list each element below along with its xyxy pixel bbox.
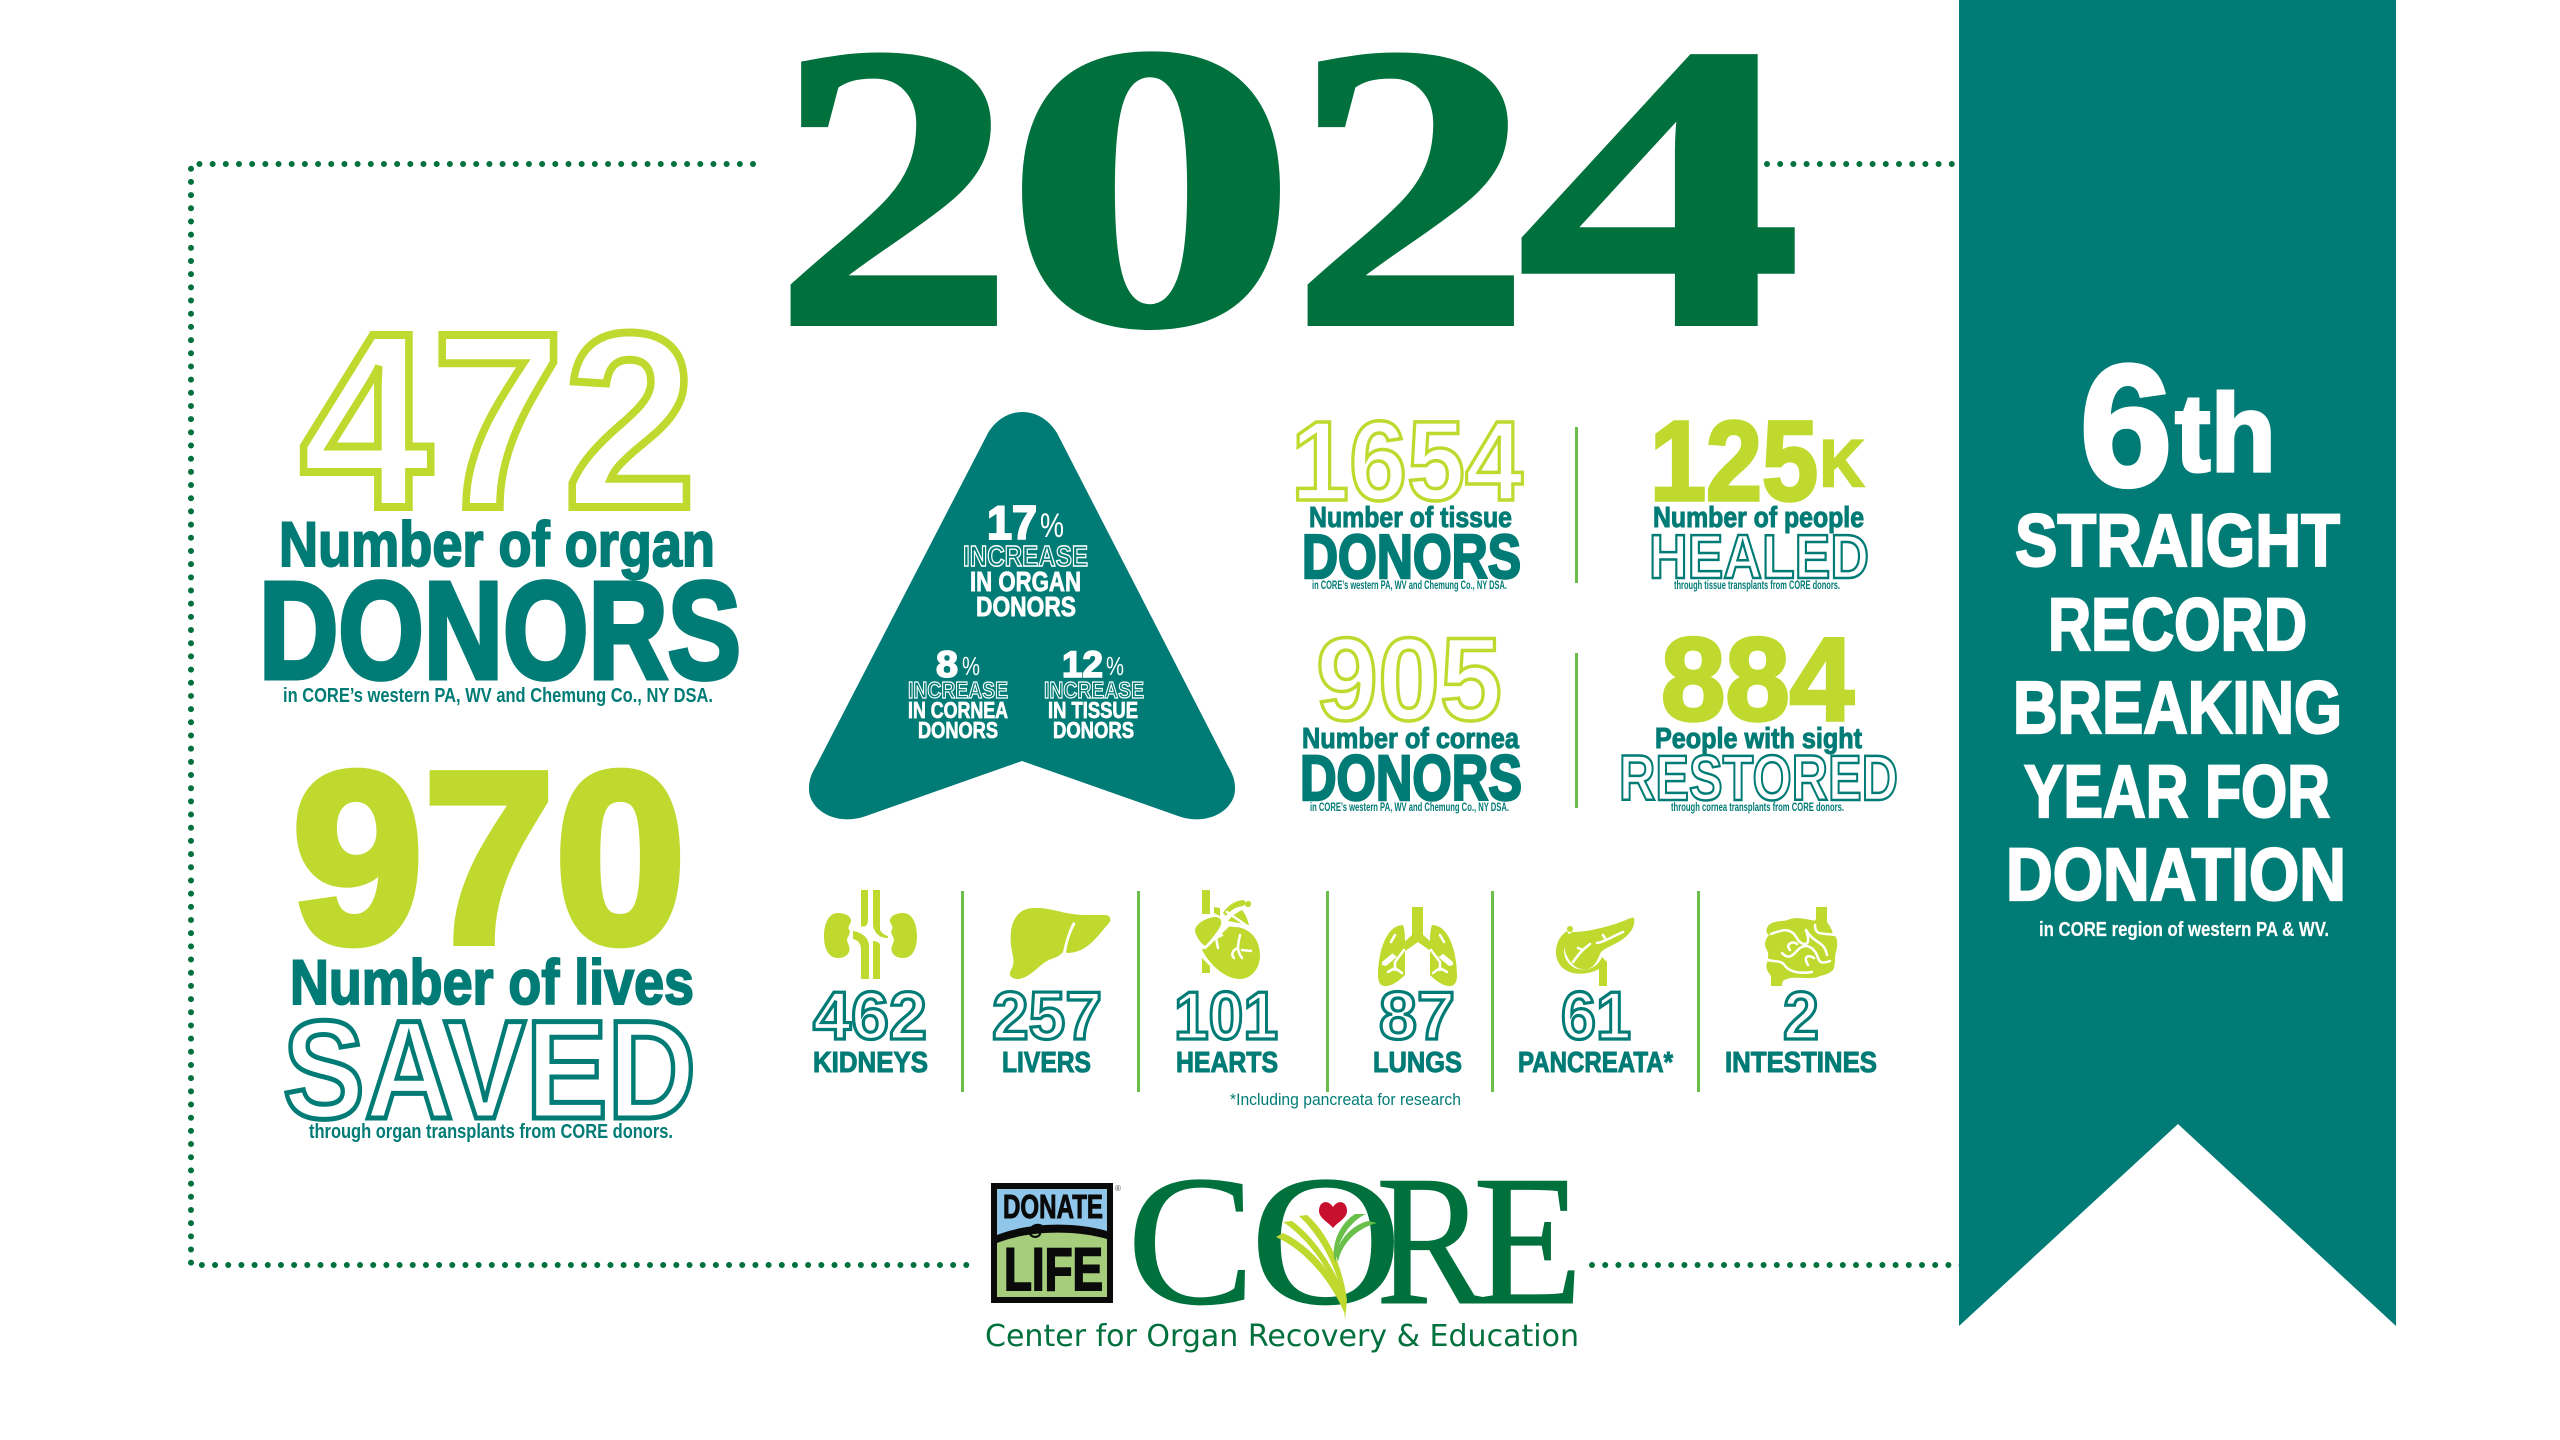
stat: 17 percent organ: 17 [987, 496, 1037, 549]
label: number of cornea: Number of cornea [1302, 723, 1520, 755]
note: DSA region: in CORE’s western PA, WV and Chemung Co., NY DSA. [283, 685, 713, 707]
stat: 17 percent organ [963, 496, 1088, 622]
stat: 17 percent organ: IN ORGAN [970, 566, 1081, 597]
note: cornea transplants: through cornea transplants from CORE donors. [1671, 800, 1844, 814]
note: organ transplants: through organ transplants from CORE donors. [309, 1121, 673, 1143]
stat: 12 percent tissue [1044, 644, 1144, 743]
number: 125K: K [1820, 426, 1864, 500]
panel: kidneys [813, 890, 928, 1079]
icon: pancreas [1556, 918, 1634, 986]
number: 970: 970 [292, 721, 686, 994]
CORE wordmark: E [1473, 1138, 1583, 1344]
icon: heart [1195, 890, 1260, 979]
number: 472: 472 [300, 281, 696, 560]
icon: leaves [1276, 1214, 1377, 1320]
stat: 8 percent cornea: 8 [936, 644, 958, 685]
number: 87: 87 [1379, 978, 1455, 1054]
stat: 8 percent cornea: IN CORNEA [908, 697, 1008, 723]
note: region: in CORE region of western PA & WV. [2039, 919, 2329, 941]
logo: Donate Life [991, 1183, 1121, 1303]
stat: 12 percent tissue: DONORS [1053, 717, 1134, 743]
headline: straight record breaking year for donation: STRAIGHT [2015, 499, 2340, 582]
registered mark: ® [1115, 1184, 1121, 1193]
note: DSA region: in CORE’s western PA, WV and Chemung Co., NY DSA. [1312, 578, 1507, 592]
icon: liver [1010, 908, 1110, 979]
panel: hearts [1174, 890, 1278, 1079]
label: donors: DONORS [1302, 523, 1521, 592]
stat: 8 percent cornea: DONORS [918, 717, 998, 743]
icon: intestines [1765, 907, 1837, 986]
label: donors: DONORS [1300, 742, 1522, 814]
headline: straight record breaking year for donation: YEAR FOR [2024, 750, 2330, 833]
stat: 8 percent cornea: % [962, 651, 980, 681]
number: 1654: 1654 [1291, 398, 1523, 524]
stat: 17 percent organ: INCREASE [963, 541, 1088, 573]
panel: pancreata [1518, 918, 1674, 1079]
headline: straight record breaking year for donation [2006, 499, 2346, 916]
headline: 6th: th [2175, 372, 2276, 495]
label: number of lives: Number of lives [290, 948, 694, 1018]
title: 2024 [774, 0, 1801, 411]
label: people with sight: People with sight [1655, 723, 1862, 755]
panel: percentage increase arrow [809, 412, 1235, 819]
label: healed: HEALED [1649, 523, 1869, 592]
label: intestines: INTESTINES [1725, 1047, 1877, 1079]
label: number of people: Number of people [1653, 502, 1864, 534]
headline: straight record breaking year for donation: DONATION [2006, 833, 2346, 916]
number: 905: 905 [1316, 614, 1502, 746]
note: DSA region: in CORE’s western PA, WV and Chemung Co., NY DSA. [1310, 800, 1509, 814]
number: 2: 2 [1783, 978, 1819, 1054]
stat: 12 percent tissue: INCREASE [1044, 677, 1144, 703]
stat: 8 percent cornea: INCREASE [908, 677, 1008, 703]
CORE wordmark: C [1127, 1138, 1255, 1344]
note: tissue transplants: through tissue transplants from CORE donors. [1674, 578, 1840, 592]
stat: 12 percent tissue: 12 [1062, 644, 1103, 685]
label: number of tissue: Number of tissue [1309, 502, 1512, 534]
swirl [1030, 1225, 1042, 1237]
icon: lungs [1378, 907, 1457, 986]
number: 257: 257 [992, 978, 1102, 1054]
panel: cornea donors [1300, 614, 1522, 814]
LIFE wordmark: LIFE [1004, 1236, 1103, 1303]
number: 125K: 125 [1650, 398, 1818, 524]
ribbon shape [1959, 0, 2396, 1326]
ribbon: record-breaking banner [1959, 0, 2396, 1326]
label: hearts: HEARTS [1176, 1047, 1278, 1079]
icon: kidneys [824, 890, 917, 979]
CORE wordmark: R [1376, 1138, 1486, 1344]
label: number of organ: Number of organ [279, 510, 715, 580]
number: 462: 462 [813, 978, 927, 1054]
panel: organ donors [259, 281, 741, 708]
stat: 12 percent tissue: % [1106, 651, 1124, 681]
label: restored: RESTORED [1619, 742, 1898, 814]
label: donors: DONORS [259, 554, 741, 708]
number: 61: 61 [1561, 978, 1631, 1054]
panel: sight restored [1619, 614, 1898, 814]
arrow shape [809, 412, 1235, 819]
icon: heart [1319, 1202, 1347, 1228]
panel: people healed [1649, 398, 1869, 592]
number: 884: 884 [1661, 614, 1854, 746]
stat: 17 percent organ: % [1040, 507, 1064, 545]
headline: 6th [2080, 330, 2276, 522]
headline: straight record breaking year for donation: RECORD [2048, 583, 2307, 666]
logo tagline: Center for Organ Recovery & Education [985, 1319, 1579, 1354]
CORE wordmark [1127, 1138, 1583, 1344]
stat: 12 percent tissue: IN TISSUE [1048, 697, 1138, 723]
footnote: *Including pancreata for research [1230, 1090, 1461, 1109]
stat: 8 percent cornea [908, 644, 1008, 743]
CORE wordmark: O [1250, 1138, 1402, 1344]
headline: straight record breaking year for donation: BREAKING [2013, 666, 2342, 749]
stat: 17 percent organ: DONORS [976, 591, 1076, 622]
label: pancreata: PANCREATA* [1518, 1047, 1674, 1079]
panel: tissue donors [1291, 398, 1523, 592]
label: saved: SAVED [283, 991, 696, 1148]
panel: intestines [1725, 907, 1877, 1079]
DONATE wordmark: DONATE [1003, 1188, 1103, 1225]
label: kidneys: KIDNEYS [813, 1047, 928, 1079]
label: livers: LIVERS [1002, 1047, 1091, 1079]
logo: CORE [985, 1138, 1583, 1354]
number: 101: 101 [1174, 978, 1278, 1054]
headline: 6th: 6 [2080, 330, 2172, 522]
panel: lives saved [283, 721, 696, 1148]
label: lungs: LUNGS [1373, 1047, 1462, 1079]
panel: lungs [1373, 907, 1462, 1079]
panel: livers [992, 908, 1110, 1079]
